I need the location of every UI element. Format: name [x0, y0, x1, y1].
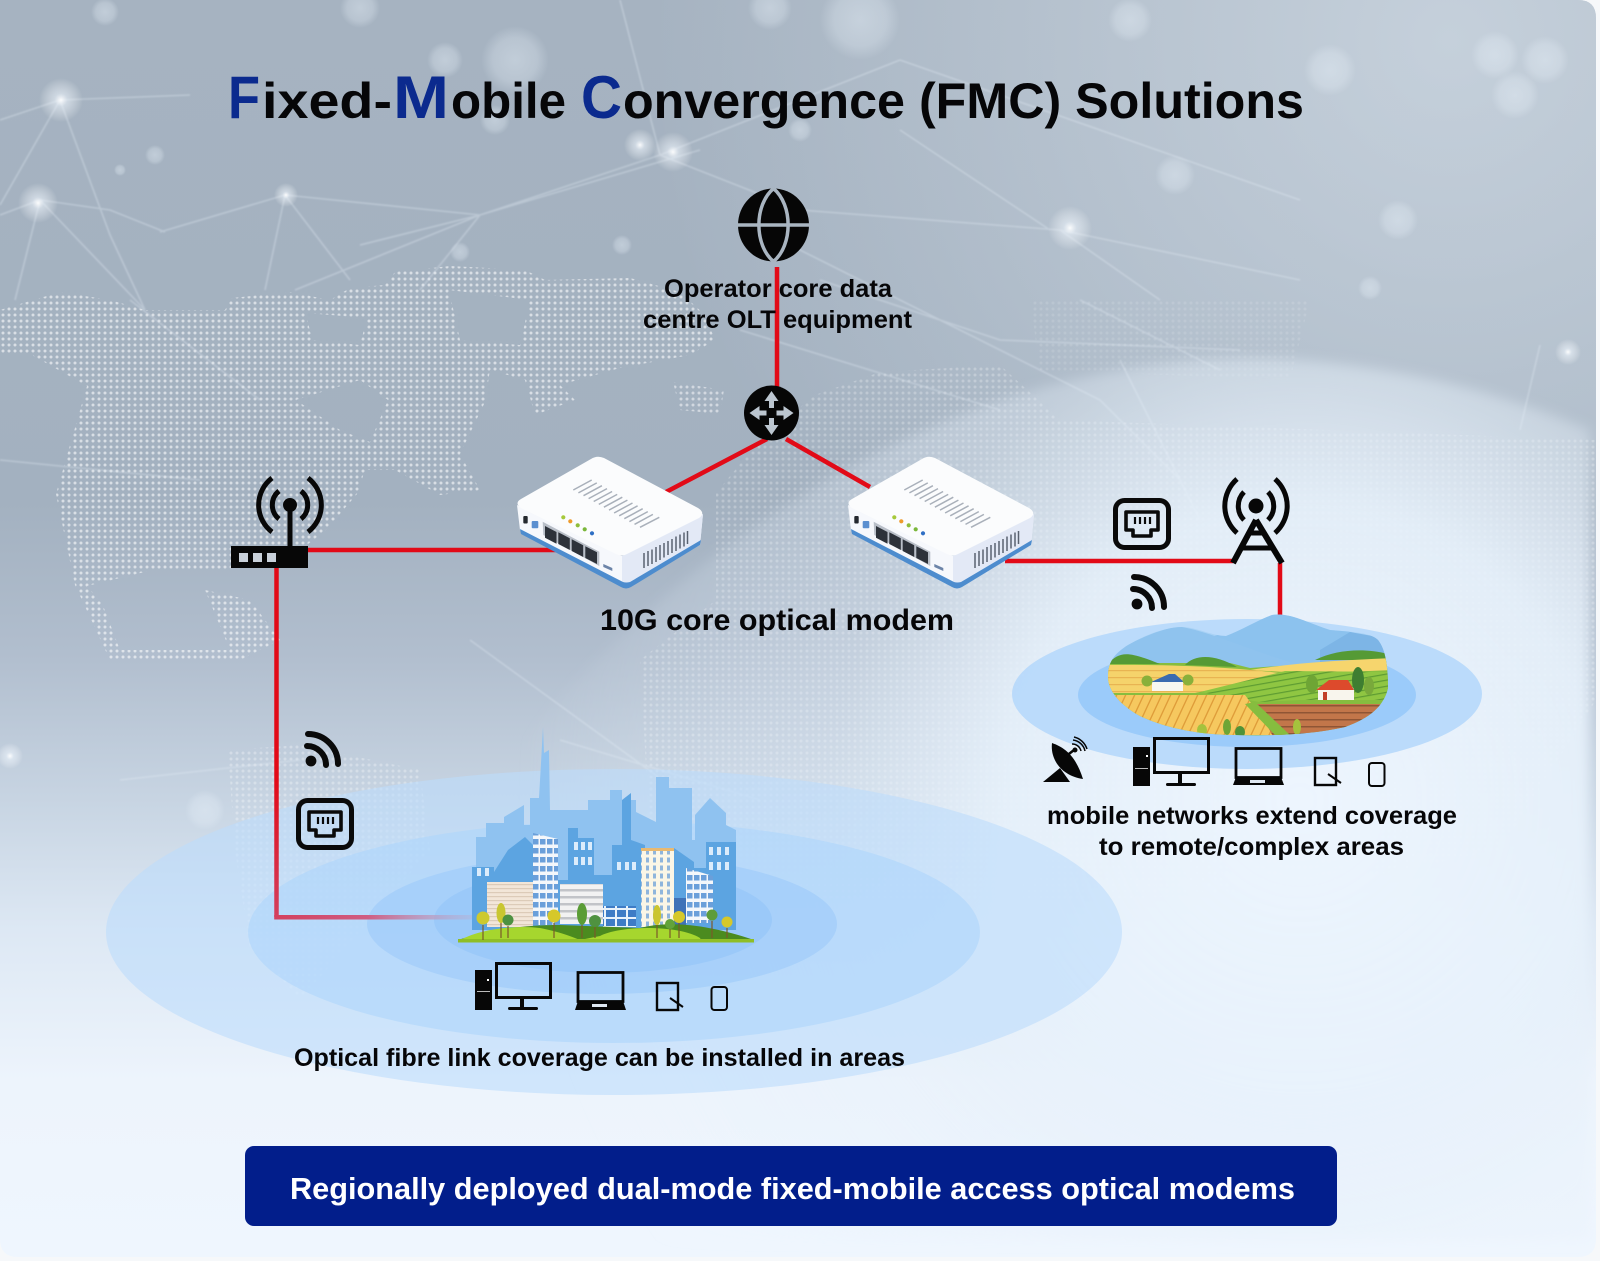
world map [2, 266, 1594, 820]
label: operator core: centre OLT equipment [643, 306, 913, 334]
title: M [393, 64, 449, 131]
icon: globe [737, 188, 810, 262]
right coverage rings [1012, 619, 1482, 769]
icon: cell tower [1225, 479, 1287, 563]
label: 10G core optical modem: 10G core optical modem [600, 604, 954, 637]
illustration: city skyline [458, 727, 754, 942]
network lines [0, 0, 1540, 800]
icon: left ethernet port [298, 800, 352, 848]
illustration: farmland [1108, 614, 1388, 736]
icons: rural satellite dish [1043, 737, 1087, 782]
label: mobile networks: to remote/complex areas [1099, 833, 1404, 861]
title: C [581, 64, 622, 131]
icon: left wifi [306, 734, 338, 766]
label: mobile networks: mobile networks extend coverage [1047, 802, 1457, 830]
title: ixed- [262, 73, 392, 129]
title: onvergence (FMC) Solutions [623, 73, 1304, 129]
icon: wireless router [231, 478, 321, 568]
title [228, 64, 1304, 131]
icon: router hub [744, 386, 799, 440]
icons: urban devices [475, 964, 727, 1010]
banner [245, 1146, 1337, 1226]
label: operator core [643, 275, 913, 334]
red fibre links [274, 267, 1280, 920]
label: mobile networks [1047, 802, 1457, 861]
icon: left optical modem [517, 457, 703, 588]
label: operator core: Operator core data [664, 275, 893, 303]
glowing nodes [0, 0, 1581, 830]
icon: right optical modem [848, 457, 1034, 588]
icons: rural devices [1133, 738, 1384, 786]
icon: right ethernet port [1116, 500, 1168, 548]
label: optical fibre coverage: Optical fibre link coverage can be installed in areas [294, 1044, 905, 1072]
left coverage rings [106, 769, 1122, 1095]
title: F [228, 64, 260, 131]
banner: Regionally deployed dual-mode fixed-mobile access optical modems [290, 1171, 1295, 1206]
title: obile [451, 73, 566, 129]
icon: right wifi [1132, 577, 1164, 609]
